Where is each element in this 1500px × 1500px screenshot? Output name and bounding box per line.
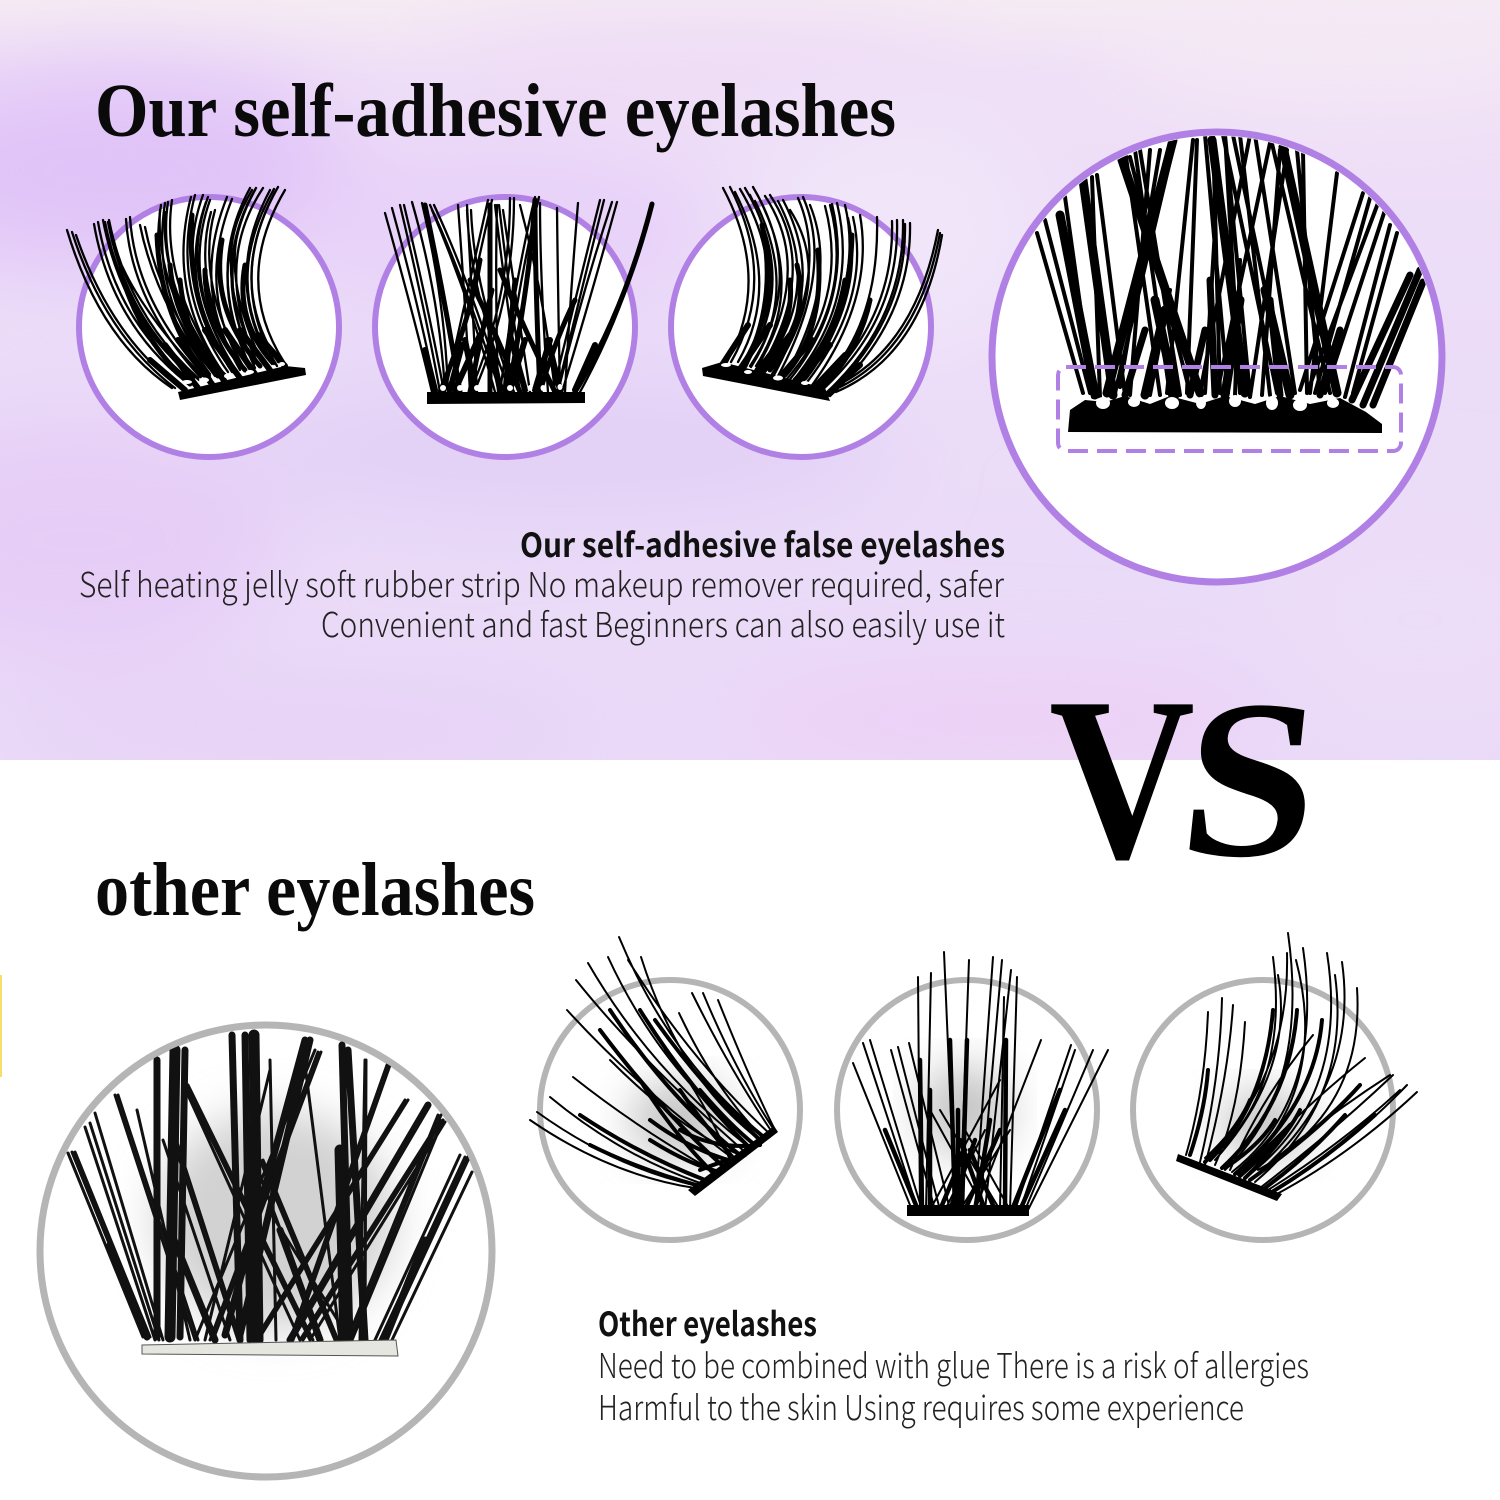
VS mark	[1049, 650, 1331, 908]
title: other eyelashes: other eyelashes	[95, 848, 535, 932]
subheading: Other eyelashes	[598, 1298, 817, 1346]
VS mark: V	[1049, 650, 1195, 908]
text block: other eyelashes	[598, 1298, 1309, 1430]
icon: other lash circle 3	[1133, 933, 1417, 1240]
icon: lash sample circle 1	[67, 187, 339, 457]
text block: our self-adhesive false eyelashes	[79, 519, 1005, 647]
edge mark: yellow sliver	[0, 975, 2, 1077]
body line 1: Self heating jelly soft rubber strip No makeup remover required, safer	[79, 558, 1005, 607]
body line 2: Convenient and fast Beginners can also easily use it	[321, 598, 1005, 647]
icon: other lash circle 1	[530, 937, 800, 1240]
subheading: Our self-adhesive false eyelashes	[520, 519, 1005, 567]
VS mark: S	[1171, 655, 1331, 905]
title: our self-adhesive eyelashes: Our self-adhesive eyelashes	[95, 69, 896, 153]
panel: purple watercolor background	[0, 0, 1500, 770]
body line 1: Need to be combined with glue There is a risk of allergies	[598, 1339, 1309, 1388]
icon: lash sample circle 3	[671, 187, 942, 457]
icon: enlarged other lash	[40, 1025, 492, 1477]
icon: lash sample circle 2	[375, 197, 652, 457]
body line 2: Harmful to the skin Using requires some experience	[598, 1381, 1244, 1430]
icon: other lash circle 2	[837, 952, 1108, 1240]
white lower panel	[0, 760, 1500, 1500]
icon: enlarged self-adhesive lash with dashed highlight	[992, 132, 1442, 582]
